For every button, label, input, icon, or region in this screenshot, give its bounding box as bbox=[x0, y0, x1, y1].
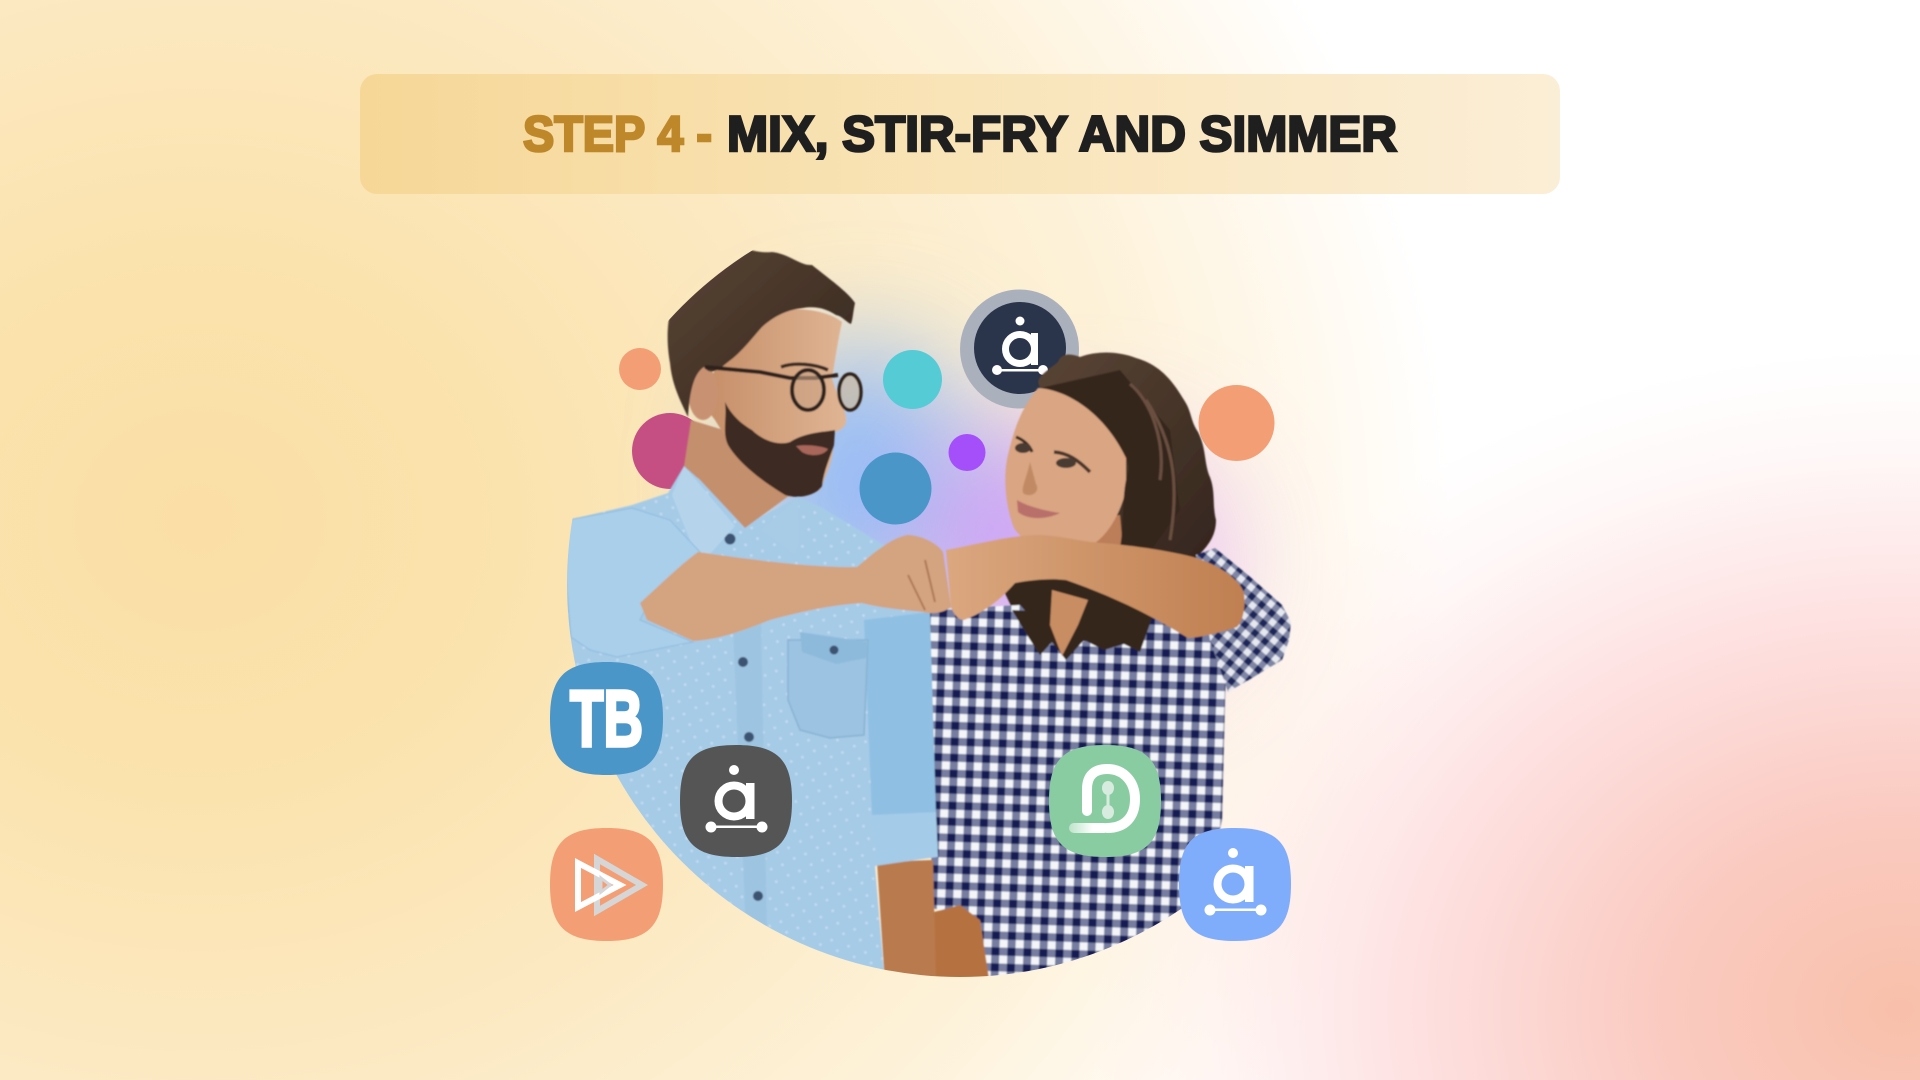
woman: hair back bbox=[1038, 353, 1216, 565]
man: forearm lower bbox=[877, 860, 936, 985]
man: beard bbox=[725, 402, 835, 497]
woman: neck bbox=[1096, 514, 1123, 546]
circle: purple bbox=[948, 434, 986, 471]
title: step name: MIX, STIR-FRY AND SIMMER bbox=[727, 106, 1397, 162]
title banner bbox=[360, 74, 1560, 194]
man: pocket flap bbox=[800, 632, 868, 664]
man: face bbox=[700, 309, 846, 497]
circle: magenta bbox=[632, 413, 708, 489]
woman: neck opening bbox=[1050, 590, 1088, 656]
woman: nose bbox=[1023, 462, 1037, 495]
man: hair bbox=[668, 248, 855, 417]
title: step label: STEP 4 - bbox=[523, 106, 712, 162]
man: placket bbox=[734, 626, 766, 926]
woman: forearm and fist bbox=[946, 535, 1245, 638]
woman: front hair strand bbox=[1040, 370, 1180, 552]
icon: dark grey logo squircle bbox=[680, 745, 792, 857]
woman: mouth bbox=[1017, 500, 1060, 518]
man: forearm bbox=[640, 535, 951, 641]
man: denim shirt body bbox=[560, 466, 936, 985]
woman: rolled sleeve bbox=[1196, 548, 1291, 692]
circle: small orange bbox=[619, 348, 661, 390]
man: right sleeve bbox=[864, 612, 936, 815]
woman: eyes and brows bbox=[1015, 437, 1090, 472]
woman: lower hair bbox=[1004, 578, 1152, 642]
man: neck bbox=[684, 420, 790, 528]
man: shirt buttons bbox=[724, 534, 838, 901]
woman: face bbox=[1005, 388, 1126, 549]
man: glasses bbox=[705, 364, 861, 410]
icon: TB app squircle bbox=[550, 662, 663, 775]
woman bbox=[928, 353, 1291, 990]
woman: lower hair strands over shirt bbox=[1012, 610, 1152, 660]
man: mouth bbox=[796, 445, 828, 455]
man bbox=[560, 248, 951, 985]
man: pocket bbox=[788, 640, 868, 738]
circle: large orange bbox=[1198, 385, 1274, 461]
icon: light blue logo squircle bbox=[1179, 828, 1291, 941]
circle: blue bbox=[860, 452, 932, 524]
icon: green D squircle bbox=[1049, 745, 1161, 857]
decorative circles bbox=[619, 348, 1274, 524]
woman: checked shirt body bbox=[929, 604, 1227, 976]
icon: orange play squircle bbox=[550, 828, 663, 941]
woman: left forearm bbox=[934, 905, 990, 985]
man: rolled cuff bbox=[871, 812, 938, 864]
icon: round dark logo badge bbox=[960, 290, 1079, 408]
woman: ear bbox=[1124, 462, 1158, 512]
man: fist finger lines bbox=[908, 560, 935, 610]
circle: teal bbox=[883, 350, 942, 409]
colour glow behind the people bbox=[745, 345, 1235, 690]
man: collar bbox=[672, 468, 799, 554]
photo: two people fist-bumping bbox=[560, 248, 1291, 990]
man: left rolled sleeve bbox=[566, 508, 700, 657]
woman: hair highlights bbox=[1130, 384, 1174, 540]
man: ear bbox=[688, 367, 714, 421]
icon text: TB: TB bbox=[570, 674, 643, 763]
